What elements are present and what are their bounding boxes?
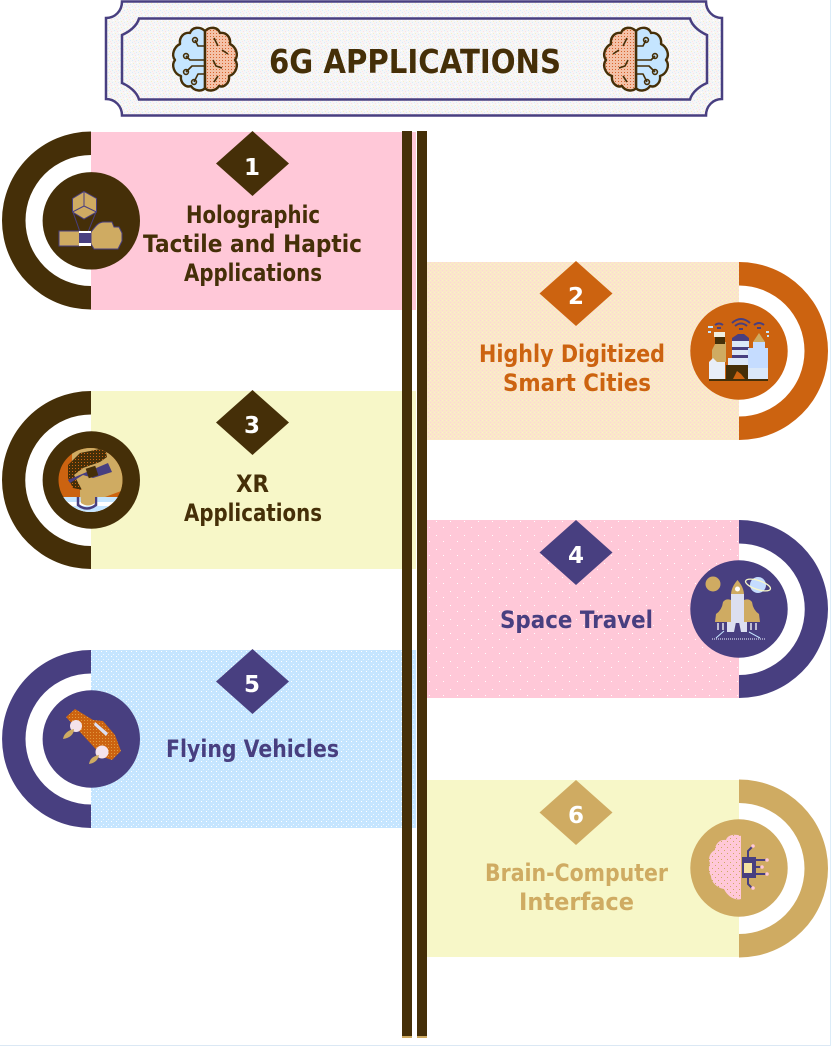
panel: 5 flying vehicles — [2, 649, 416, 828]
text: holographic tactile and haptic applications: Tactile and Haptic — [143, 230, 362, 258]
text: holographic tactile and haptic applications: Holographic — [186, 201, 320, 229]
icon: smart city — [708, 319, 769, 381]
text: xr applications: XR — [236, 470, 269, 498]
text: highly digitized smart cities: Highly Digitized — [479, 340, 665, 368]
header plaque — [106, 2, 722, 116]
text: holographic tactile and haptic applications: Applications — [184, 259, 322, 287]
text: xr applications: Applications — [184, 499, 322, 527]
icon: flying car — [63, 709, 121, 764]
panel: 1 holographic — [2, 131, 416, 310]
text: highly digitized smart cities — [479, 340, 665, 397]
panel: 4 space travel — [427, 520, 828, 698]
title: 6G APPLICATIONS — [269, 42, 561, 81]
number 2: 2 — [568, 284, 584, 310]
icon: right brain — [604, 28, 668, 90]
number 4: 4 — [568, 543, 584, 569]
text: brain-computer interface: Interface — [519, 888, 634, 916]
diamond number 4 — [540, 520, 612, 585]
panel: 6 brain-computer interface — [427, 780, 828, 958]
number 3: 3 — [244, 413, 260, 439]
text: xr applications — [184, 470, 322, 527]
diamond number 3 — [216, 390, 289, 455]
text: brain-computer interface — [485, 859, 668, 916]
icon: person wearing xr headset — [58, 447, 124, 513]
number 6: 6 — [568, 803, 584, 829]
diamond number 6 — [540, 780, 612, 845]
panel: 3 xr applications — [2, 390, 416, 569]
diamond number 1 — [216, 131, 289, 196]
text: highly digitized smart cities: Smart Cities — [503, 369, 651, 397]
diamond number 2 — [540, 261, 612, 326]
text: brain-computer interface: Brain-Computer — [485, 859, 668, 887]
text: holographic tactile and haptic applications — [143, 201, 362, 287]
central timeline bars — [402, 131, 427, 1038]
icon: rocket and planets — [706, 576, 772, 639]
text: flying vehicles: Flying Vehicles — [166, 735, 339, 763]
number 5: 5 — [244, 672, 260, 698]
panel: 2 smart cities — [427, 261, 828, 440]
icon: left brain — [173, 28, 237, 90]
icon: hand and hologram cube — [59, 192, 122, 249]
number 1: 1 — [244, 155, 260, 181]
text: space travel: Space Travel — [500, 606, 653, 634]
diamond number 5 — [216, 649, 289, 714]
icon: brain with chip — [709, 835, 769, 899]
